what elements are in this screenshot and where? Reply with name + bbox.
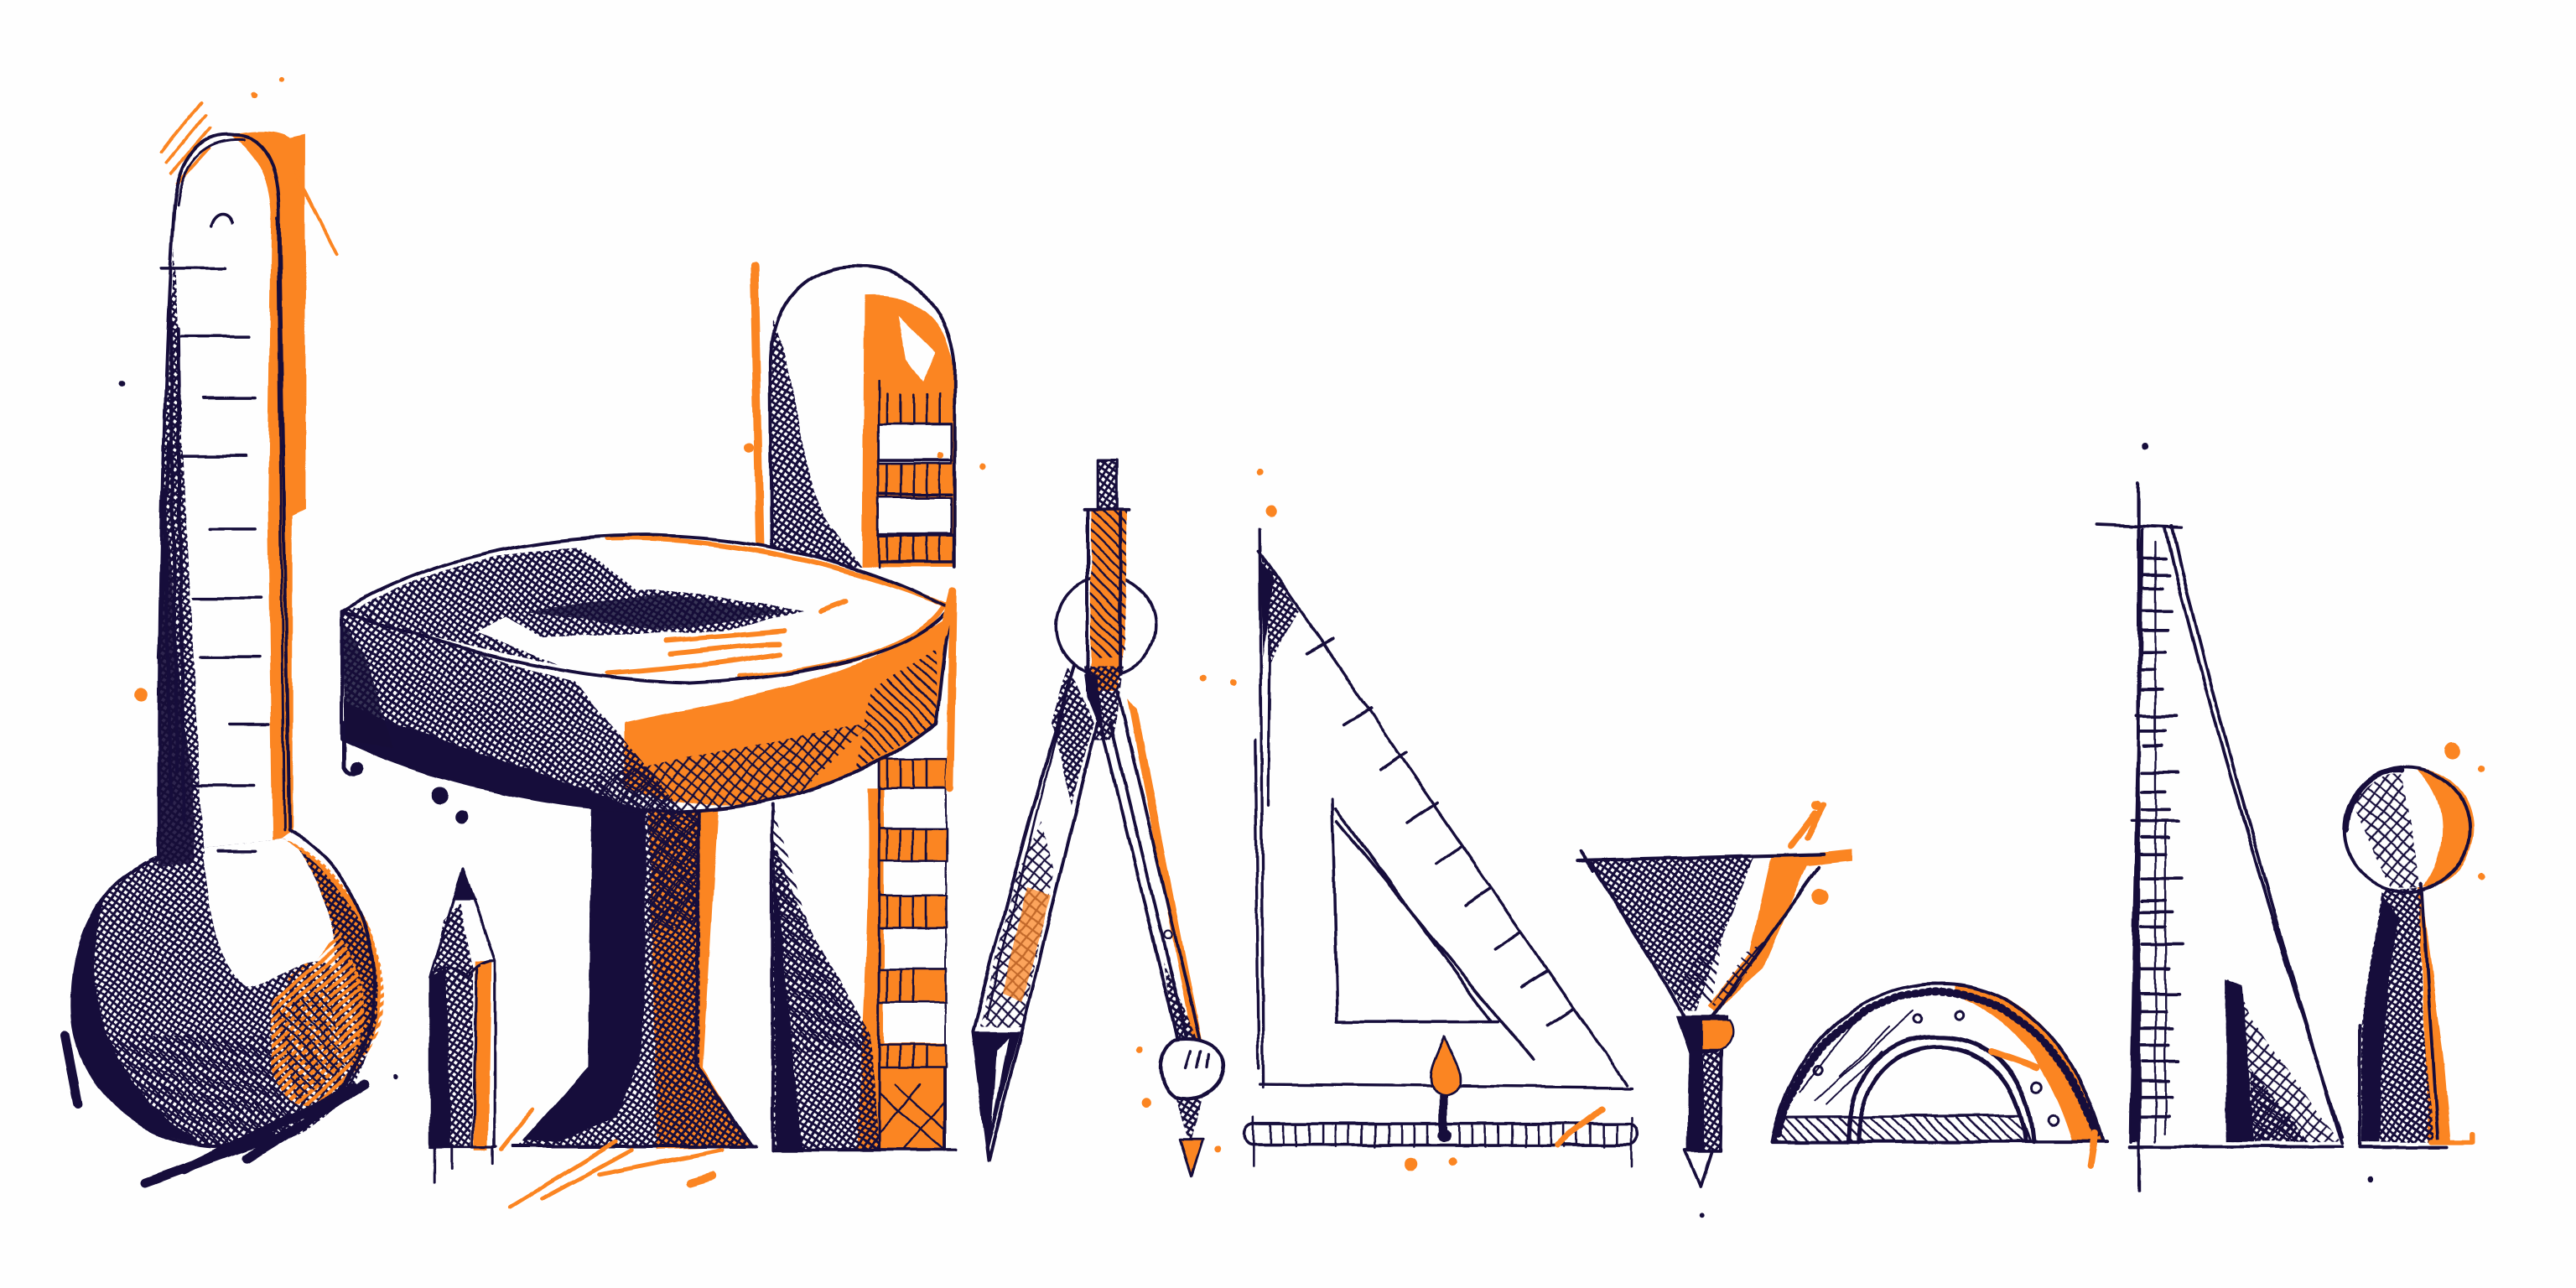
triangle outline: [2096, 483, 2343, 1189]
protractor: [1771, 984, 2106, 1166]
stand stem: [501, 805, 756, 1208]
thermometer tube shading: [159, 247, 204, 863]
tall narrow triangle: [2096, 483, 2343, 1189]
column lower section: [772, 756, 956, 1150]
compass handle: [1084, 460, 1129, 740]
thermometer orange wash: [161, 101, 384, 1093]
stand disc body: [329, 536, 953, 822]
thermometer: [58, 101, 394, 1183]
rounded ruler column: [754, 266, 956, 1150]
pawn ball: [2345, 767, 2473, 892]
set square edge ticks: [1308, 639, 1572, 1026]
set square corner hatching: [1262, 555, 1298, 665]
flame marker: [1430, 1036, 1461, 1142]
protractor hatching and marks: [1799, 1010, 1914, 1104]
thermometer scale ticks: [161, 215, 269, 851]
protractor orange rim: [1955, 986, 2103, 1144]
funnel: [1577, 805, 1853, 1187]
thermometer outline: [72, 134, 375, 1147]
set square outline: [1255, 529, 1631, 1088]
stand disc outline and orange highlights: [608, 538, 945, 677]
funnel collar: [1675, 1015, 1733, 1055]
funnel cone: [1577, 805, 1853, 1015]
triangle lower hatching: [2226, 979, 2341, 1142]
protractor inner arch: [1848, 1036, 2033, 1142]
pawn body: [2359, 884, 2473, 1147]
small ruler with flame marker: [1244, 1036, 1637, 1166]
pawn shaped instrument: [2345, 767, 2473, 1147]
compass left leg: [973, 665, 1098, 1160]
funnel spout: [1685, 1052, 1722, 1187]
pencil: [430, 867, 496, 1183]
drafting compass: [973, 460, 1224, 1176]
thermometer bulb hatching: [74, 839, 378, 1145]
protractor arc and ticks: [1771, 984, 2106, 1142]
protractor base band: [1774, 1115, 2031, 1142]
triangle scale ticks: [2132, 558, 2182, 1117]
ruler bar: [1244, 1109, 1637, 1166]
stand disc top hole: [493, 588, 805, 637]
compass ball foot and tip: [1161, 1039, 1224, 1176]
disc stand: [329, 536, 953, 1208]
stand drip marks: [343, 723, 361, 774]
compass right leg: [1101, 690, 1202, 1045]
set square inner triangle: [1332, 798, 1533, 1060]
compass ring: [1057, 577, 1155, 675]
thermometer base scribble: [65, 1035, 365, 1183]
column upper section: [754, 266, 954, 567]
large set square: [1255, 529, 1631, 1088]
